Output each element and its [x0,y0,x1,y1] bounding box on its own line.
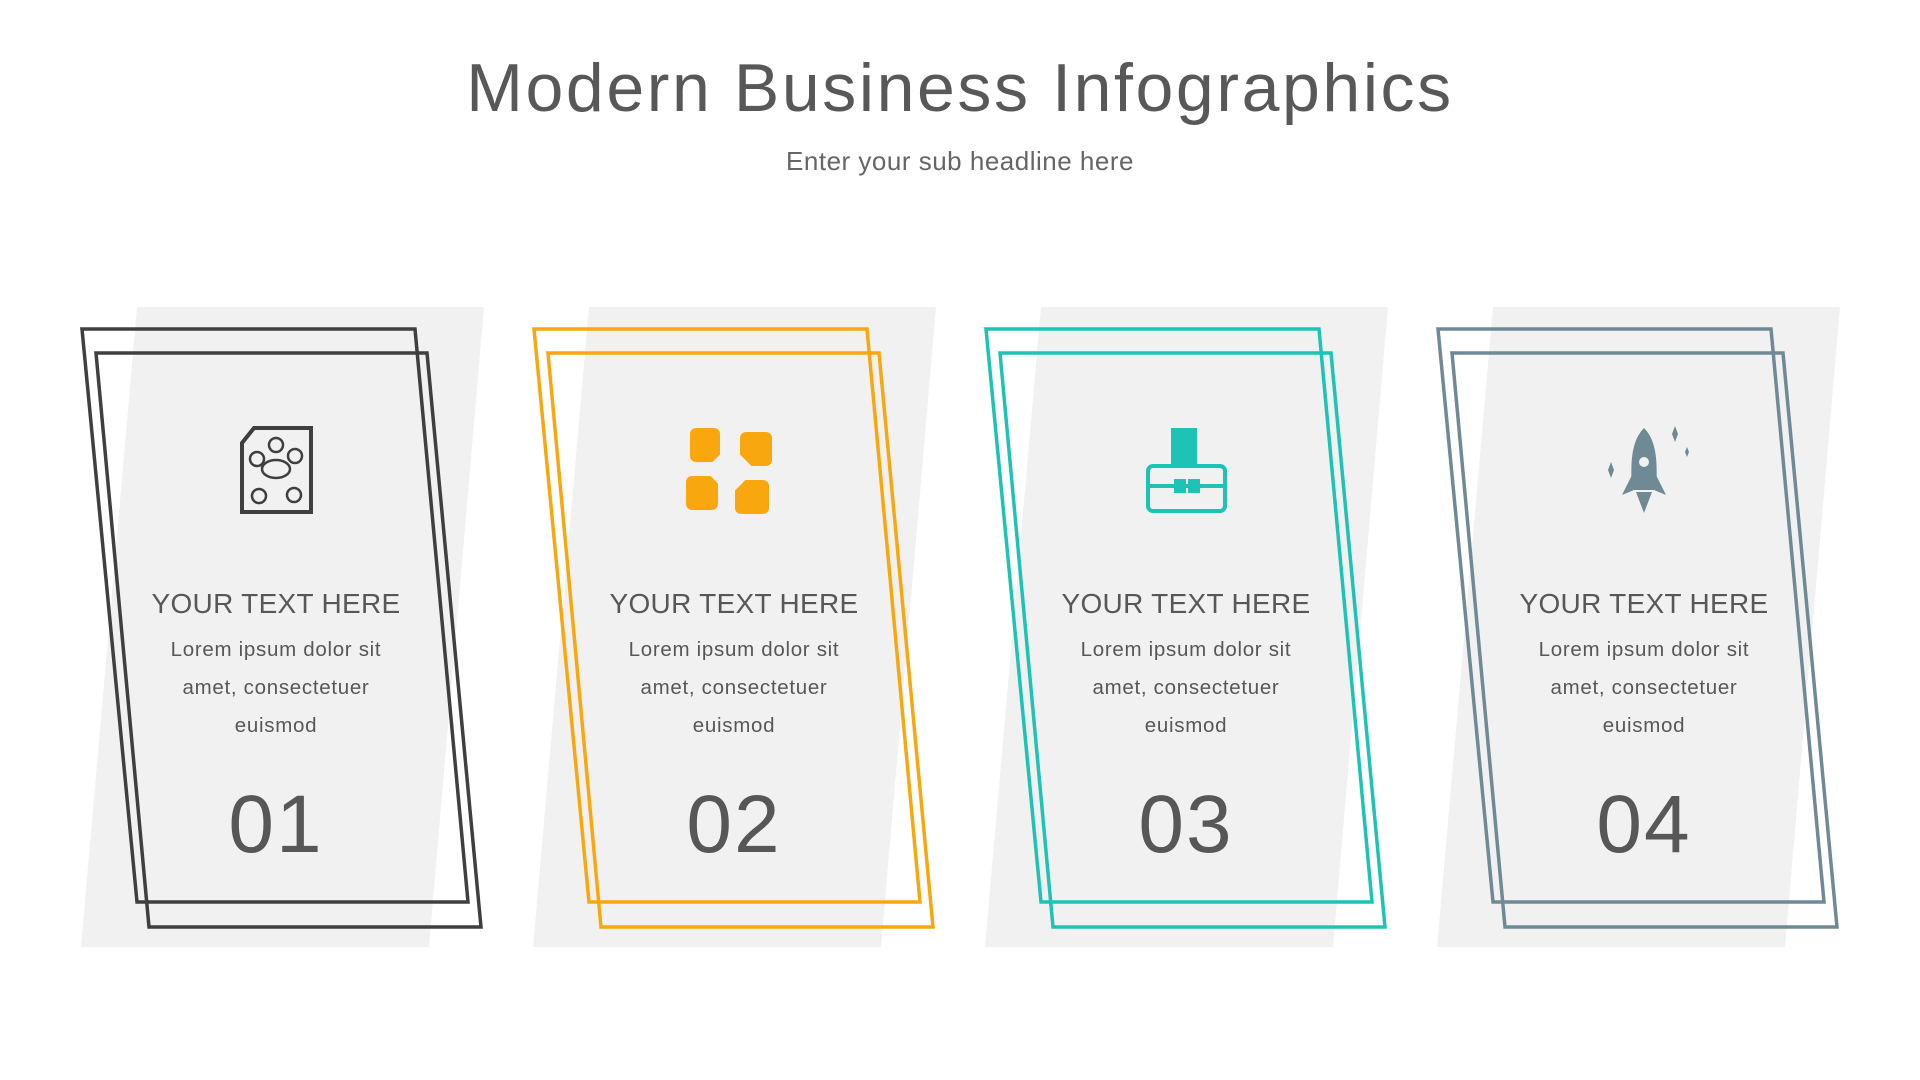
panel 1 text: amet, consectetuer [183,676,369,699]
panel 2 text [610,588,858,870]
panel 4 text: YOUR TEXT HERE [1520,588,1768,619]
icon: rocket [1608,426,1689,513]
panel 4 text: Lorem ipsum dolor sit [1539,638,1749,661]
panel 1 text: YOUR TEXT HERE [152,588,400,619]
subtitle: Enter your sub headline here [786,146,1134,176]
panel 1 text: euismod [235,714,317,737]
panel 2 shapes [533,307,936,947]
panel 3 text [1062,588,1310,870]
title: Modern Business Infographics [466,50,1454,126]
panel 3 text: euismod [1145,714,1227,737]
panel 4 shapes [1437,307,1840,947]
panel 2 text: euismod [693,714,775,737]
panel 4 text: euismod [1603,714,1685,737]
panel 1 text: 01 [228,779,324,870]
icon: document diagram [242,428,311,512]
panel 3 shapes [985,307,1388,947]
panel 2 text: Lorem ipsum dolor sit [629,638,839,661]
panel 4 text [1520,588,1768,870]
panel 3 text: YOUR TEXT HERE [1062,588,1310,619]
panel 3 text: amet, consectetuer [1093,676,1279,699]
panel 2 text: amet, consectetuer [641,676,827,699]
panel 3 text: 03 [1138,779,1234,870]
icon: briefcase [1148,430,1225,511]
panel 1 text [152,588,400,870]
panel 1 text: Lorem ipsum dolor sit [171,638,381,661]
panel 3 text: Lorem ipsum dolor sit [1081,638,1291,661]
panel 2 text: 02 [686,779,782,870]
icon: hands [686,428,772,514]
panel 1 shapes [81,307,484,947]
panel 2 text: YOUR TEXT HERE [610,588,858,619]
panel 4 text: 04 [1596,779,1692,870]
panel 4 text: amet, consectetuer [1551,676,1737,699]
